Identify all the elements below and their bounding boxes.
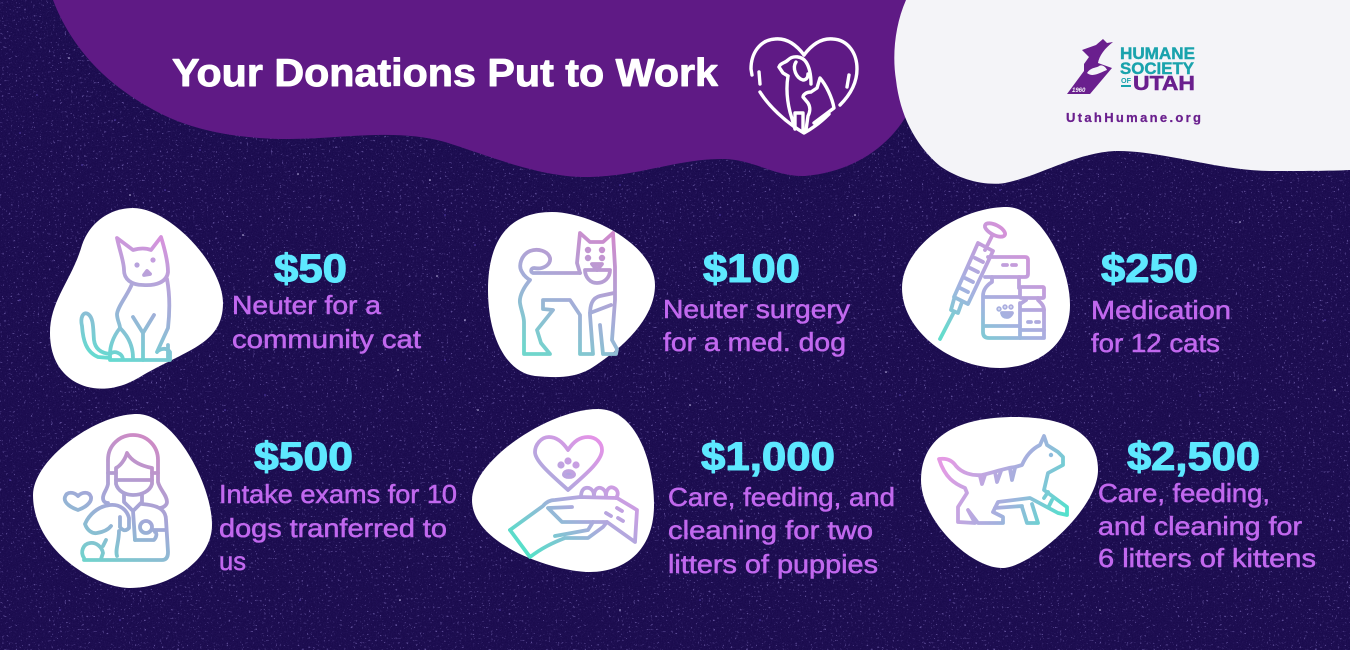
logo: Humane Society of Utah: SOCIETY bbox=[1120, 60, 1194, 78]
description: Intake exams for 10 bbox=[219, 479, 457, 509]
amount: $2,500 bbox=[1127, 435, 1260, 479]
panel: $100 bbox=[488, 212, 850, 377]
logo: Humane Society of Utah bbox=[1067, 39, 1195, 95]
logo silhouette bbox=[1067, 39, 1113, 94]
description: litters of puppies bbox=[668, 549, 878, 579]
panel: $500 bbox=[33, 414, 457, 588]
website url: UtahHumane.org bbox=[1066, 110, 1201, 125]
title: Your Donations Put to Work bbox=[172, 52, 718, 95]
panel: $1,000 bbox=[472, 409, 895, 579]
icon: standing dog bbox=[520, 233, 617, 354]
amount: $1,000 bbox=[701, 435, 835, 479]
icon: hand holding paw with heart bbox=[510, 437, 637, 557]
description: community cat bbox=[232, 324, 422, 354]
logo: Humane Society of Utah: OF bbox=[1121, 78, 1132, 85]
description: and cleaning for bbox=[1098, 511, 1302, 541]
description: Neuter surgery bbox=[663, 294, 850, 324]
logo: Humane Society of Utah: UTAH bbox=[1133, 73, 1195, 95]
description: for a med. dog bbox=[663, 327, 846, 357]
amount: $50 bbox=[274, 247, 347, 291]
amount: $500 bbox=[254, 435, 353, 479]
description: Care, feeding, bbox=[1098, 478, 1270, 508]
description: Neuter for a bbox=[232, 290, 382, 320]
amount: $250 bbox=[1101, 247, 1198, 291]
blob bbox=[921, 417, 1098, 568]
blob bbox=[488, 212, 655, 377]
description: Care, feeding, and bbox=[668, 482, 895, 512]
blob bbox=[902, 207, 1070, 368]
icon: vet with dog bbox=[65, 435, 168, 560]
icon: heart with dog and cat bbox=[751, 39, 857, 133]
icon: syringe and bottles bbox=[940, 221, 1044, 339]
logo year: 1960 bbox=[1072, 88, 1086, 94]
logo name: HUMANE bbox=[1120, 45, 1195, 63]
description: dogs tranferred to bbox=[219, 513, 447, 543]
purple header blob bbox=[53, 0, 930, 177]
logo heart bbox=[1087, 65, 1107, 75]
panel: $250 bbox=[902, 207, 1231, 368]
panel: $2,500 bbox=[921, 417, 1316, 573]
amount: $100 bbox=[703, 247, 800, 291]
blob bbox=[472, 409, 654, 572]
description: Medication bbox=[1091, 295, 1231, 325]
blob bbox=[33, 414, 212, 588]
blob bbox=[50, 208, 223, 389]
description: us bbox=[219, 546, 246, 576]
white logo blob bbox=[894, 0, 1350, 184]
description: 6 litters of kittens bbox=[1098, 543, 1316, 573]
description: for 12 cats bbox=[1091, 328, 1220, 358]
icon: sitting cat bbox=[81, 237, 170, 360]
description: cleaning for two bbox=[668, 515, 873, 545]
panel: $50 bbox=[50, 208, 422, 389]
icon: walking tabby cat bbox=[939, 436, 1067, 523]
